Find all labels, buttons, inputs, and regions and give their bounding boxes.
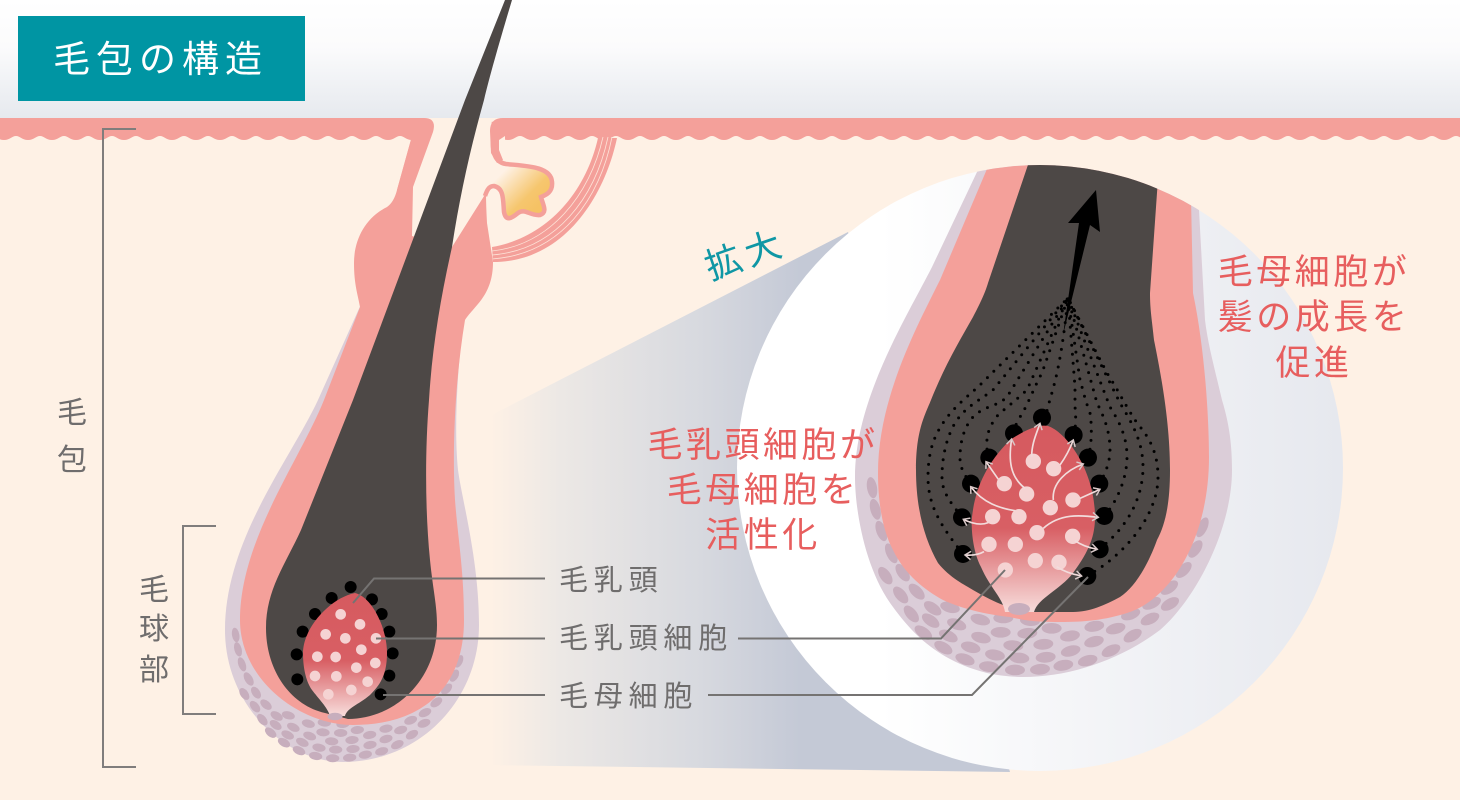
label: hair matrix cell: 毛母細胞: [559, 680, 698, 713]
dotted growth paths: [928, 298, 1158, 576]
callout: papilla activates matrix: 毛母細胞を: [667, 471, 859, 510]
background: air above skin: [0, 0, 1460, 118]
callout: matrix promotes growth: 毛母細胞が: [1218, 253, 1410, 292]
enlarged hair matrix: [916, 150, 1170, 612]
label: hair bulb vertical: 球: [139, 613, 169, 646]
signal arrows: [963, 423, 1100, 576]
growth arrow: [1063, 190, 1100, 335]
callout: papilla activates matrix: 毛乳頭細胞が: [647, 426, 879, 465]
magnified circle: [737, 165, 1343, 771]
skin surface band: [0, 118, 1460, 190]
hair shaft and matrix: [266, 0, 512, 719]
arrector pili muscle: [492, 137, 617, 262]
title: 毛包の構造: [53, 39, 268, 80]
bracket: hair bulb: [183, 526, 216, 714]
sebaceous gland: [485, 122, 552, 218]
title: [18, 16, 305, 101]
magnification cone: [478, 232, 1010, 772]
small follicle diagram: [225, 0, 617, 762]
callout: matrix promotes growth: 促進: [1275, 344, 1353, 383]
label: hair bulb vertical: 部: [139, 654, 169, 687]
matrix cells: [291, 581, 399, 700]
enlarged pink wall: [878, 150, 1209, 622]
enlarged sheath cells: [865, 476, 1211, 675]
label: hair bulb vertical: 毛: [139, 574, 169, 607]
label: dermal papilla: 毛乳頭: [559, 564, 663, 597]
bracket: follicle: [103, 129, 136, 767]
outer root sheath: [225, 302, 479, 762]
enlarged follicle: [855, 150, 1232, 677]
enlarged sheath: [855, 150, 1232, 677]
outer follicle wall: [240, 136, 493, 725]
leader lines: [353, 570, 1088, 695]
enlarged dermal papilla: [972, 426, 1095, 612]
label: follicle vertical: 毛: [57, 397, 87, 430]
enlarged matrix cells: [953, 409, 1113, 585]
callout: matrix promotes growth: 髪の成長を: [1218, 298, 1410, 337]
dermal papilla: [303, 593, 387, 716]
label: follicle vertical: 包: [57, 444, 87, 477]
dermal papilla cells: [310, 609, 381, 700]
label: dermal papilla cell: 毛乳頭細胞: [559, 622, 733, 655]
callout: papilla activates matrix: 活性化: [705, 516, 821, 555]
papilla neck cell: [328, 713, 342, 720]
sheath cells: [231, 627, 465, 762]
neck cell: [1008, 603, 1030, 615]
label: zoom: 拡大: [699, 222, 792, 288]
enlarged papilla cells: [981, 454, 1081, 578]
